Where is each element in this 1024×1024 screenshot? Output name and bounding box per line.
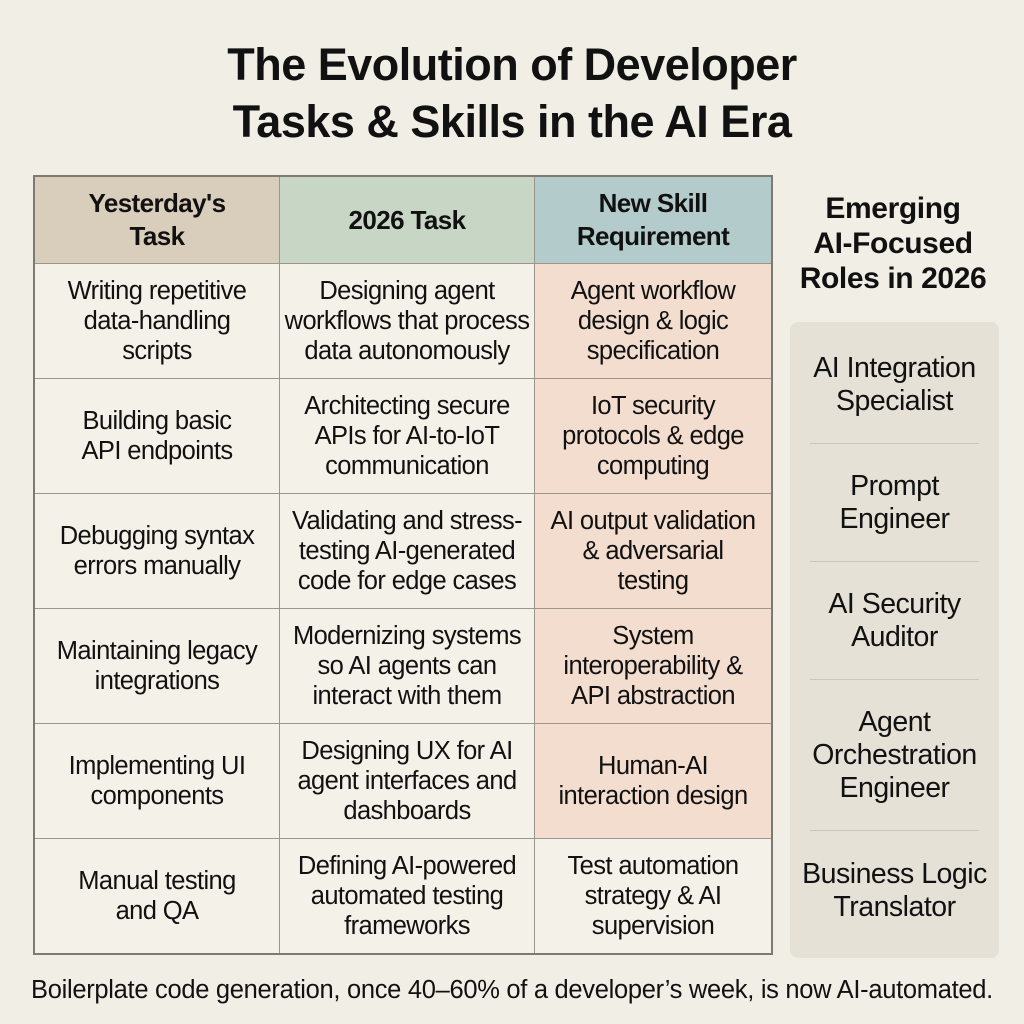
comparison table: Manual testing <box>78 867 236 895</box>
sidebar heading: Emerging <box>825 192 961 225</box>
comparison table: automated testing <box>311 882 503 910</box>
comparison table: Architecting secure <box>304 392 510 420</box>
comparison table: testing AI-generated <box>299 537 515 565</box>
role: Business Logic Translator: Business Logic <box>802 858 987 890</box>
comparison table: Defining AI-powered <box>298 852 516 880</box>
role: Agent Orchestration Engineer <box>812 706 977 804</box>
role: AI Integration Specialist <box>813 352 976 417</box>
comparison table: IoT security <box>591 392 715 420</box>
comparison table: dashboards <box>343 797 471 825</box>
comparison table: API endpoints <box>82 437 232 465</box>
role: Agent Orchestration Engineer: Agent <box>858 706 930 738</box>
comparison table: strategy & AI <box>585 882 721 910</box>
comparison table: specification <box>587 337 719 365</box>
title <box>227 39 797 147</box>
comparison table: Building basic <box>83 407 231 435</box>
comparison table: agent interfaces and <box>297 767 517 795</box>
comparison table: and QA <box>116 897 198 925</box>
comparison table: Yesterday's <box>89 188 225 218</box>
title: The Evolution of Developer <box>227 39 797 90</box>
comparison table: Test automation <box>567 852 739 880</box>
footer note: Boilerplate code generation, once 40–60% of a developer’s week, is now AI-automated. <box>31 976 993 1004</box>
title: Tasks & Skills in the AI Era <box>233 96 791 147</box>
role: Prompt Engineer: Engineer <box>839 503 950 535</box>
panel: emerging roles <box>790 322 999 958</box>
role: Agent Orchestration Engineer: Engineer <box>839 772 950 804</box>
comparison table: Task <box>130 221 184 251</box>
comparison table: APIs for AI-to-IoT <box>315 422 499 450</box>
role: AI Integration Specialist: Specialist <box>836 385 953 417</box>
comparison table <box>33 175 773 955</box>
comparison table: 2026 Task <box>348 204 466 234</box>
role: AI Security Auditor: AI Security <box>828 588 961 620</box>
role: AI Integration Specialist: AI Integration <box>813 352 976 384</box>
role: Business Logic Translator: Translator <box>833 891 956 923</box>
comparison table: scripts <box>122 337 192 365</box>
comparison table: Designing UX for AI <box>301 737 513 765</box>
comparison table: protocols & edge <box>562 422 744 450</box>
role: Agent Orchestration Engineer: Orchestration <box>812 739 977 771</box>
comparison table: interaction design <box>558 782 748 810</box>
comparison table: System <box>612 622 694 650</box>
comparison table: Human-AI <box>598 752 708 780</box>
role: Prompt Engineer <box>839 470 950 535</box>
comparison table: interact with them <box>312 682 502 710</box>
comparison table: AI output validation <box>551 507 755 535</box>
comparison table: design & logic <box>578 307 728 335</box>
comparison table: Writing repetitive <box>68 277 246 305</box>
sidebar heading <box>800 192 986 295</box>
comparison table: testing <box>618 567 688 595</box>
comparison table: Agent workflow <box>571 277 735 305</box>
comparison table: data-handling <box>84 307 230 335</box>
comparison table: & adversarial <box>582 537 724 565</box>
comparison table: Modernizing systems <box>293 622 521 650</box>
comparison table: Maintaining legacy <box>57 637 257 665</box>
role: AI Security Auditor <box>828 588 961 653</box>
comparison table: Implementing UI <box>69 752 245 780</box>
comparison table: integrations <box>95 667 219 695</box>
comparison table: errors manually <box>74 552 240 580</box>
comparison table: Debugging syntax <box>60 522 254 550</box>
comparison table: data autonomously <box>304 337 510 365</box>
comparison table: code for edge cases <box>298 567 516 595</box>
comparison table: interoperability & <box>563 652 743 680</box>
comparison table: Designing agent <box>319 277 495 305</box>
role: Business Logic Translator <box>802 858 987 923</box>
comparison table: components <box>91 782 223 810</box>
comparison table: frameworks <box>344 912 470 940</box>
comparison table: API abstraction <box>571 682 735 710</box>
comparison table: New Skill <box>599 188 707 218</box>
comparison table: communication <box>325 452 489 480</box>
role: AI Security Auditor: Auditor <box>851 621 938 653</box>
role: Prompt Engineer: Prompt <box>850 470 939 502</box>
sidebar heading: AI-Focused <box>813 227 973 260</box>
sidebar heading: Roles in 2026 <box>800 262 986 295</box>
comparison table: Requirement <box>577 221 729 251</box>
comparison table: supervision <box>592 912 714 940</box>
comparison table: Validating and stress- <box>292 507 522 535</box>
comparison table: workflows that process <box>285 307 529 335</box>
comparison table: so AI agents can <box>318 652 496 680</box>
comparison table: computing <box>597 452 709 480</box>
